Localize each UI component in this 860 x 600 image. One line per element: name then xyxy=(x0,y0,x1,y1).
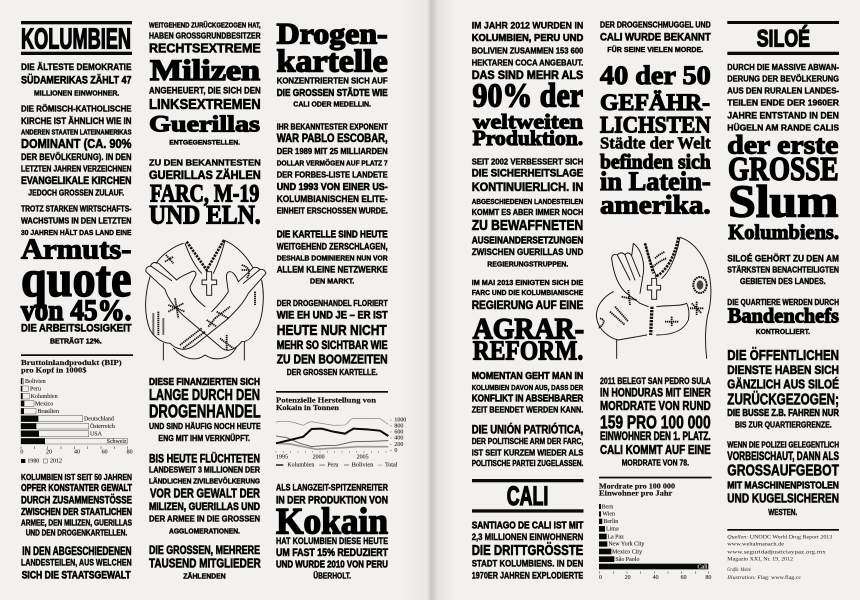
line chart: cocaine production: 1995 xyxy=(276,454,288,460)
bar chart: GDP per capita: 0 xyxy=(20,450,23,456)
text block: coca production: BOLIVIEN ZUSAMMEN 153 600 xyxy=(472,46,584,55)
text block: coca production: weltweiten xyxy=(473,109,583,133)
text block: refugees: VOR DER GEWALT DER xyxy=(150,486,260,501)
sources: www.weltalmanach.de xyxy=(727,542,785,548)
text block: drug trade: DROGENHANDEL xyxy=(149,402,261,422)
text block: Unión Patriótica: IST SEIT KURZEM WIEDER ALS xyxy=(472,448,583,458)
text block: police xyxy=(727,440,839,517)
text block: Kokain: Kokain xyxy=(276,501,388,542)
text block: agrarian reform: IM MAI 2013 EINIGTEN SICH DIE xyxy=(472,278,583,287)
text block: refugees: BIS HEUTE FLÜCHTETEN xyxy=(149,450,260,465)
text block: gang leaders: DIE QUARTIERE WERDEN DURCH xyxy=(727,298,839,307)
text block: smuggling: FÜR SEINE VIELEN MORDE. xyxy=(607,45,703,54)
text block: disadvantaged xyxy=(727,253,839,286)
line chart: cocaine production: 2005 xyxy=(357,454,369,460)
text block: Kokain: IN DER PRODUKTION VON xyxy=(276,494,388,506)
text block: drug trade flourishes: MEHR SO SICHTBAR WIE xyxy=(277,339,388,352)
text block: San Pedro Sula: MORDRATE VON 78. xyxy=(622,457,689,467)
bar chart: murder rate: Lima xyxy=(606,527,619,533)
sources: Grafik: Moiré xyxy=(727,566,751,573)
text block: disadvantaged: GEBIETEN DES LANDES. xyxy=(740,277,826,286)
text block: refugees: MILIZEN, GUERILLAS UND xyxy=(149,501,260,513)
text block: smuggling: CALI WURDE BEKANNT xyxy=(600,32,711,44)
bar chart: GDP per capita: Peru xyxy=(30,386,41,392)
text block: poverty rate xyxy=(21,205,132,345)
icon: tattooed torso with praying hands xyxy=(596,237,711,358)
text block: drug trade flourishes: HEUTE NUR NICHT xyxy=(277,323,387,339)
text block: drug trade: DIESE FINANZIERTEN SICH xyxy=(149,377,260,388)
text block: militias: Milizen xyxy=(150,54,260,87)
text block: migration: HÜGELN AM RANDE CALIS xyxy=(727,123,839,133)
text block: first big slum: Kolumbiens. xyxy=(728,220,839,244)
text block: 40 of 50 cities xyxy=(600,61,711,219)
text block: first big slum xyxy=(727,130,839,244)
heading: Cali: CALI xyxy=(507,481,548,511)
text block: 40 of 50 cities: amerika. xyxy=(600,190,711,219)
bar chart: GDP per capita xyxy=(20,354,133,465)
text block: 40 of 50 cities: befinden sich xyxy=(600,149,711,173)
text block: networks: DEN MARKT. xyxy=(310,276,354,285)
heading: Cali xyxy=(472,479,584,513)
text block: drug trade flourishes xyxy=(277,299,388,377)
text block: conflict: IN DEN ABGESCHIEDENEN xyxy=(22,545,132,558)
panel: column 2 lower text xyxy=(149,377,261,580)
bar chart: GDP per capita: Kolumbien xyxy=(31,394,58,400)
text block: agrarian reform: AGRAR- xyxy=(473,312,584,345)
text block: disadvantaged: SILOÉ GEHÖRT ZU DEN AM xyxy=(727,253,839,264)
panel: column 3 cartels xyxy=(276,17,406,580)
text block: cartels: KONZENTRIERTEN SICH AUF xyxy=(277,75,388,85)
heading: Kolumbien: KOLUMBIEN xyxy=(21,23,131,55)
text block: militias xyxy=(149,20,261,146)
text block: Santiago de Cali: 1970ER JAHREN EXPLODIERTE xyxy=(472,569,583,580)
text block: drug trade xyxy=(149,377,261,443)
text block: church xyxy=(21,104,132,197)
text block: church: ANDEREN STAATEN LATEINAMERIKAS xyxy=(21,129,132,136)
line chart: cocaine production xyxy=(276,391,406,469)
text block: conflict: KOLUMBIEN IST SEIT 50 JAHREN xyxy=(21,472,132,482)
text block: FARC, M-19, ELN: GUERILLAS ZÄHLEN xyxy=(149,169,261,182)
text block: migration: TEILEN ENDE DER 1960ER xyxy=(727,98,840,108)
text block: networks: WEITGEHEND ZERSCHLAGEN, xyxy=(277,240,388,251)
text block: security xyxy=(472,156,583,269)
bar chart: murder rate: Wien xyxy=(602,512,615,518)
text block: Kokain: UM FAST 15% REDUZIERT xyxy=(276,547,388,559)
text block: poverty rate: von 45%. xyxy=(21,294,132,327)
text block: conflict: LANDESTEILEN, AUS WELCHEN xyxy=(21,557,132,568)
text block: drug trade flourishes: ZU DEN BOOMZEITEN xyxy=(277,351,388,366)
bar chart: GDP per capita: USA xyxy=(90,432,103,438)
text block: FARC, M-19, ELN: FARC, M-19 xyxy=(150,181,259,208)
line chart: cocaine production: 2000 xyxy=(313,454,325,460)
text block: church: KIRCHE IST ÄHNLICH WIE IN xyxy=(21,115,132,126)
line chart: cocaine production: 400 xyxy=(394,436,403,442)
text block: poverty rate: Armuts- xyxy=(21,234,132,265)
text block: 40 of 50 cities: in Latein- xyxy=(600,167,711,196)
line chart: cocaine production: Kolumbien xyxy=(287,463,314,469)
text block: church: DER BEVÖLKERUNG). IN DEN xyxy=(21,151,132,162)
text block: coca production: DAS SIND MEHR ALS xyxy=(472,69,584,82)
text block: coca production xyxy=(472,19,584,150)
panel: column 4 coca and reform xyxy=(472,19,584,580)
text block: Pablo Escobar: IHR BEKANNTESTER EXPONENT xyxy=(277,122,388,131)
text block: Kokain xyxy=(276,482,388,580)
text block: Santiago de Cali: STADT KOLUMBIENS. IN DEN xyxy=(472,558,583,569)
text block: church: DOMINANT (CA. 90% xyxy=(21,136,132,151)
text block: agrarian reform xyxy=(472,278,584,365)
heading: Siloé xyxy=(727,21,839,55)
text block: migration: DERUNG DER BEVÖLKERUNG xyxy=(727,74,839,84)
bar chart: GDP per capita: pro Kopf in 1000$ xyxy=(21,367,87,374)
text block: conflict: ZWISCHEN DER STAATLICHEN xyxy=(21,507,132,518)
panel: column 5 murders xyxy=(596,20,712,581)
text block: migration: JAHRE ENTSTAND IN DEN xyxy=(727,109,839,120)
text block: gang leaders: Bandenchefs xyxy=(728,303,839,327)
text block: coca production: IM JAHR 2012 WURDEN IN xyxy=(472,19,584,30)
text block: Pablo Escobar xyxy=(277,122,388,215)
text block: first big slum: Slum xyxy=(728,176,838,227)
text block: drug trade: LANGE DURCH DEN xyxy=(149,387,260,404)
text block: FARC, M-19, ELN: ZU DEN BEKANNTESTEN xyxy=(149,158,261,168)
text block: militias: ANGEHEUERT, DIE SICH DEN xyxy=(149,84,261,95)
text block: San Pedro Sula: 2011 BELEGT SAN PEDRO SULA xyxy=(600,375,711,386)
text block: San Pedro Sula: 159 PRO 100 000 xyxy=(600,412,711,433)
sources: www.seguridadjusticiaypaz.org.mx xyxy=(727,549,826,555)
bar chart: murder rate: La Paz xyxy=(607,534,624,540)
text block: cartels: CALI ODER MEDELLIN. xyxy=(293,100,371,109)
text block: members: TAUSEND MITGLIEDER xyxy=(149,556,261,571)
text block: conflict xyxy=(21,472,133,581)
text block: conflict: SICH DIE STAATSGEWALT xyxy=(22,569,131,581)
line chart: cocaine production: Peru xyxy=(327,463,338,469)
text block: cartels: kartelle xyxy=(277,43,388,79)
text block: Unión Patriótica: DIE UNIÓN PATRIÓTICA, xyxy=(472,423,583,436)
text block: migration xyxy=(727,62,840,133)
text block: San Pedro Sula: MORDRATE VON RUND xyxy=(600,398,711,413)
text block: smuggling xyxy=(600,20,711,54)
bar chart: GDP per capita: Österreich xyxy=(90,423,115,430)
text block: public services: BIS ZUR QUARTIERGRENZE. xyxy=(735,419,832,429)
bar chart: GDP per capita: 2012 xyxy=(50,459,62,465)
bar chart: GDP per capita: Schweiz xyxy=(107,439,127,445)
text block: cartels: Drogen- xyxy=(277,17,388,50)
text block: cartels xyxy=(277,17,388,109)
text block: cartels: DIE GROSSEN STÄDTE WIE xyxy=(277,86,388,99)
line chart: cocaine production: 800 xyxy=(394,424,403,430)
text block: 40 of 50 cities: LICHSTEN xyxy=(600,112,711,137)
text block: church: LETZTEN JAHREN VERZEICHNEN xyxy=(21,165,132,174)
text block: Kokain: ÜBERHOLT. xyxy=(313,570,351,580)
text block: police: MIT MASCHINENPISTOLEN xyxy=(727,480,839,491)
text block: Santiago de Cali: DIE DRITTGRÖSSTE xyxy=(472,542,584,559)
bar chart: murder rate xyxy=(599,477,712,581)
text block: conflict: DURCH ZUSAMMENSTÖSSE xyxy=(21,493,132,506)
bar chart: murder rate: Mordrate pro 100 000 xyxy=(599,483,676,490)
text block: gang leaders: KONTROLLIERT. xyxy=(756,327,810,336)
text block: members: DIE GROSSEN, MEHRERE xyxy=(149,544,260,557)
panel: column 6 Siloé xyxy=(726,21,840,581)
text block: public services: DIENSTE HABEN SICH xyxy=(727,363,839,377)
text block: poverty rate: BETRÄGT 12%. xyxy=(50,336,102,345)
text block: police: WESTEN. xyxy=(768,508,797,517)
text block: Pablo Escobar: DER 1989 MIT 25 MILLIARDEN xyxy=(277,147,388,156)
text block: democracy xyxy=(21,61,132,97)
text block: 40 of 50 cities: Städte der Welt xyxy=(600,133,711,152)
bar chart: murder rate: 40 xyxy=(653,575,659,581)
text block: agrarian reform: REGIERUNG AUF EINE xyxy=(472,299,584,312)
text block: security: REGIERUNGSTRUPPEN. xyxy=(487,260,568,269)
text block: 40 of 50 cities: GEFÄHR- xyxy=(600,90,710,115)
heading: Siloé: SILOÉ xyxy=(757,25,810,53)
text block: coca production: 90% der xyxy=(472,78,583,115)
text block: San Pedro Sula: CALI KOMMT AUF EINE xyxy=(600,442,711,457)
text block: security: SEIT 2002 VERBESSERT SICH xyxy=(472,156,583,166)
text block: church: JEDOCH GROSSEN ZULAUF. xyxy=(28,188,124,197)
bar chart: murder rate: 80 xyxy=(705,575,711,581)
bar chart: murder rate: New York City xyxy=(608,542,644,548)
line chart: cocaine production: 200 xyxy=(394,442,403,448)
text block: militias: Guerillas xyxy=(149,112,260,137)
text block: first big slum: der erste xyxy=(727,130,838,159)
text block: poverty rate: 30 JAHREN HÄLT DAS LAND EINE xyxy=(21,228,132,237)
bar chart: murder rate: 20 xyxy=(625,575,631,581)
text block: militias: RECHTSEXTREME xyxy=(149,40,261,55)
text block: militias: ENTGEGENSTELLEN. xyxy=(169,139,240,146)
bar chart: murder rate: Berlin xyxy=(603,519,618,525)
text block: Pablo Escobar: UND 1993 VON EINER US- xyxy=(277,182,388,193)
text block: church: DIE RÖMISCH-KATHOLISCHE xyxy=(21,104,132,114)
text block: drug trade: ENG MIT IHM VERKNÜPFT. xyxy=(158,433,250,443)
text block: democracy: SÜDAMERIKAS ZÄHLT 47 xyxy=(21,73,132,86)
text block: conflict end: MOMENTAN GEHT MAN IN xyxy=(472,371,583,382)
text block: church: EVANGELIKALE KIRCHEN xyxy=(21,175,132,187)
text block: San Pedro Sula: EINWOHNER DEN 1. PLATZ. xyxy=(600,430,711,443)
text block: Santiago de Cali: 2,3 MILLIONEN EINWOHNERN xyxy=(472,531,583,542)
text block: coca production: Produktion. xyxy=(473,126,583,150)
text block: security: KOMMT ES ABER IMMER NOCH xyxy=(472,208,583,217)
text block: security: KONTINUIERLICH. IN xyxy=(472,180,583,194)
text block: members: ZÄHLENDEN xyxy=(183,571,226,580)
panel: column 2 militias xyxy=(146,20,266,360)
bar chart: murder rate: Mexico City xyxy=(612,549,642,555)
text block: poverty rate: TROTZ STARKEN WIRTSCHAFTS- xyxy=(21,205,132,214)
text block: security: ZU BEWAFFNETEN xyxy=(472,218,583,234)
text block: public services xyxy=(727,347,839,429)
text block: drug trade: UND SIND HÄUFIG NOCH HEUTE xyxy=(149,421,261,431)
text block: poverty rate: quote xyxy=(21,251,132,308)
text block: refugees: AGGLOMERATIONEN. xyxy=(169,526,240,535)
text block: militias: HABEN GROSSGRUNDBESITZER xyxy=(149,31,261,40)
bar chart: murder rate: 0 xyxy=(599,575,602,581)
line chart: cocaine production: 1000 xyxy=(394,418,406,424)
text block: agrarian reform: FARC UND DIE KOLUMBIANISCHE xyxy=(472,288,583,297)
line chart: cocaine production: 600 xyxy=(394,430,403,436)
bar chart: GDP per capita: Mexico xyxy=(35,401,53,407)
bar chart: GDP per capita: Bolivien xyxy=(25,379,46,385)
text block: conflict: ARMEE, DEN MILIZEN, GUERILLAS xyxy=(21,519,133,528)
text block: democracy: MILLIONEN EINWOHNER. xyxy=(34,88,119,97)
text block: Santiago de Cali: SANTIAGO DE CALI IST MIT xyxy=(472,520,584,531)
line chart: cocaine production: 0 xyxy=(394,448,397,454)
text block: gang leaders xyxy=(727,298,839,336)
text block: drug trade flourishes: DER DROGENHANDEL FLORIERT xyxy=(277,299,388,308)
text block: 40 of 50 cities: 40 der 50 xyxy=(600,61,711,90)
sources: Quellen: UNODC World Drug Report 2013 xyxy=(727,534,833,540)
bar chart: murder rate: Einwohner pro Jahr xyxy=(599,491,672,498)
text block: networks: DIE KARTELLE SIND HEUTE xyxy=(277,230,388,241)
line chart: cocaine production: Kokain in Tonnen xyxy=(276,405,339,412)
text block: militias: LINKSEXTREMEN xyxy=(149,97,261,113)
text block: Pablo Escobar: DER FORBES-LISTE LANDETE xyxy=(277,170,388,180)
text block: FARC, M-19, ELN xyxy=(149,158,261,229)
text block: Kokain: UND WURDE 2010 VON PERU xyxy=(276,559,388,570)
text block: disadvantaged: STÄRKSTEN BENACHTEILIGTEN xyxy=(727,266,839,275)
text block: Pablo Escobar: WAR PABLO ESCOBAR, xyxy=(277,132,388,145)
text block: San Pedro Sula: IN HONDURAS MIT EINER xyxy=(600,386,711,400)
text block: security: DIE SICHERHEITSLAGE xyxy=(472,168,583,180)
bar chart: GDP per capita: 80 xyxy=(127,450,133,456)
icon: tattooed torso with crossed arms xyxy=(146,240,266,360)
text block: Pablo Escobar: EINHEIT ERSCHOSSEN WURDE. xyxy=(277,206,388,215)
bar chart: murder rate: Bern xyxy=(602,504,613,510)
text block: conflict end xyxy=(472,371,584,415)
text block: smuggling: DER DROGENSCHMUGGEL UND xyxy=(600,20,711,29)
text block: conflict end: KOLUMBIEN DAVON AUS, DASS DER xyxy=(472,383,584,392)
bar chart: GDP per capita: Deutschland xyxy=(84,417,114,423)
bar chart: GDP per capita: 20 xyxy=(46,450,52,456)
text block: Unión Patriótica: DER POLITISCHE ARM DER FARC, xyxy=(472,437,583,446)
text block: Santiago de Cali xyxy=(472,520,584,580)
heading: Kolumbien xyxy=(21,21,132,55)
text block: Kokain: ALS LANGZEIT-SPITZENREITER xyxy=(276,482,388,493)
line chart: cocaine production: Potenzielle Herstellung von xyxy=(276,397,376,404)
text block: militias: WEITGEHEND ZURÜCKGEZOGEN HAT, xyxy=(149,20,261,29)
text block: FARC, M-19, ELN: UND ELN. xyxy=(149,200,261,229)
text block: networks: DESHALB DOMINIEREN NUN VOR xyxy=(277,254,388,263)
text block: Unión Patriótica xyxy=(472,423,583,468)
bar chart: GDP per capita: Bruttoinlandprodukt (BIP) xyxy=(21,360,122,367)
bar chart: murder rate: Cali xyxy=(697,564,708,570)
text block: agrarian reform: REFORM. xyxy=(473,335,583,365)
text block: refugees xyxy=(149,450,260,535)
text block: networks xyxy=(277,230,388,285)
bar chart: murder rate: São Paolo xyxy=(615,557,639,563)
panel: column 1 Kolumbien xyxy=(20,21,133,581)
text block: Unión Patriótica: POLITISCHE PARTEI ZUGELASSEN. xyxy=(472,459,583,468)
text block: migration: DURCH DIE MASSIVE ABWAN- xyxy=(727,62,839,72)
text block: refugees: LÄNDLICHEN ZIVILBEVÖLKERUNG xyxy=(149,476,260,485)
text block: poverty rate: DIE ARBEITSLOSIGKEIT xyxy=(21,323,132,335)
text block: conflict end: KONFLIKT IN ABSEHBARER xyxy=(472,394,584,405)
text block: conflict: OPFER KONSTANTER GEWALT xyxy=(21,483,133,494)
text block: democracy: DIE ÄLTESTE DEMOKRATIE xyxy=(21,61,132,72)
text block: networks: ALLEM KLEINE NETZWERKE xyxy=(277,263,388,274)
sources xyxy=(726,529,839,581)
text block: Pablo Escobar: KOLUMBIANISCHEN ELITE- xyxy=(277,193,388,204)
text block: conflict: UND DEN DROGENKARTELLEN. xyxy=(26,529,127,538)
text block: members xyxy=(149,544,261,580)
text block: Kokain: HAT KOLUMBIEN DIESE HEUTE xyxy=(276,535,388,546)
line chart: cocaine production: Total xyxy=(385,463,398,469)
sources: Illustration: Flag: www.flag.cc xyxy=(726,574,802,581)
text block: conflict end: ZEIT BEENDET WERDEN KANN. xyxy=(472,405,583,415)
text block: refugees: DER ARMEE IN DIE GROSSEN xyxy=(149,514,260,524)
bar chart: GDP per capita: 40 xyxy=(74,450,80,456)
line chart: cocaine production: Bolivien xyxy=(352,463,373,469)
text block: poverty rate: WACHSTUMS IN DEN LETZTEN xyxy=(21,216,132,225)
text block: security: AUSEINANDERSETZUNGEN xyxy=(472,235,583,246)
sources: Magazin XXI, Nr. 19, 2012 xyxy=(727,557,793,563)
text block: drug trade flourishes: DER GROSSEN KARTELLE. xyxy=(287,367,378,377)
text block: drug trade flourishes: WIE EH UND JE – ER IST xyxy=(277,309,388,321)
text block: security: ABGESCHIEDENEN LANDESTEILEN xyxy=(472,197,583,206)
bar chart: GDP per capita: 1980 xyxy=(27,459,39,465)
text block: Pablo Escobar: DOLLAR VERMÖGEN AUF PLATZ 7 xyxy=(277,159,388,168)
text block: migration: AUS DEN RURALEN LANDES- xyxy=(727,85,839,95)
bar chart: GDP per capita: 60 xyxy=(102,450,108,456)
text block: coca production: HEKTAREN COCA ANGEBAUT. xyxy=(472,58,583,68)
bar chart: murder rate: 60 xyxy=(681,575,687,581)
text block: refugees: LANDESWEIT 3 MILLIONEN DER xyxy=(149,466,260,475)
bar chart: GDP per capita: Brasilien xyxy=(37,409,59,415)
text block: San Pedro Sula xyxy=(600,375,711,467)
text block: security: ZWISCHEN GUERILLAS UND xyxy=(472,246,583,257)
text block: coca production: KOLUMBIEN, PERU UND xyxy=(472,33,583,44)
